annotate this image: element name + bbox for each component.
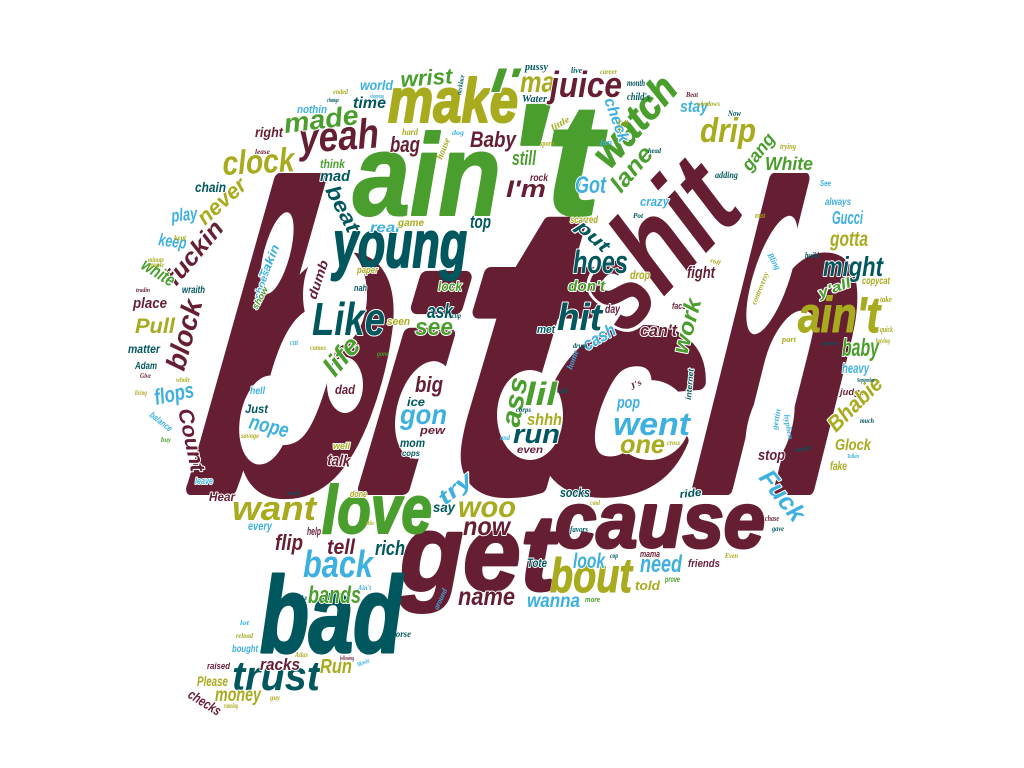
small filler words: living xyxy=(135,389,147,397)
large word: ain't (green): ain xyxy=(353,110,501,240)
small filler words: much xyxy=(860,417,874,425)
small filler words: running xyxy=(224,702,238,710)
medium words: cash xyxy=(579,320,619,354)
medium words xyxy=(128,62,890,719)
small filler words: ended xyxy=(333,88,348,96)
medium words: say xyxy=(433,499,456,515)
small filler words: Talkin xyxy=(847,454,859,460)
large word: bad: bad xyxy=(260,554,403,675)
medium words: well xyxy=(333,441,350,451)
small filler words: part xyxy=(781,335,797,344)
medium words: work xyxy=(667,294,707,356)
medium words: racks xyxy=(260,655,300,674)
medium words: Tote xyxy=(527,556,547,570)
medium words: seen xyxy=(387,316,410,328)
medium words: keep xyxy=(157,230,188,253)
large word: get: get xyxy=(399,492,559,613)
medium words: hoes xyxy=(573,244,628,280)
medium words: might xyxy=(823,251,884,282)
medium words: lock xyxy=(438,278,463,294)
medium words: day xyxy=(605,302,621,316)
medium words: pew xyxy=(419,425,447,437)
small filler words: tradin xyxy=(136,288,151,294)
medium words: done xyxy=(350,489,367,499)
small filler words: buying xyxy=(876,337,890,345)
small filler words: and xyxy=(500,434,510,442)
medium words: bag xyxy=(390,132,420,157)
medium words: wanna xyxy=(527,591,580,612)
large word: ain't (green): 't xyxy=(505,70,607,249)
medium words: Just xyxy=(245,402,269,416)
small filler words: lot xyxy=(240,619,250,627)
small filler words: around xyxy=(432,586,449,611)
medium words: trust xyxy=(232,652,322,699)
medium words: hell xyxy=(250,386,265,397)
medium words: fake xyxy=(830,459,847,473)
medium words: never xyxy=(192,171,252,230)
medium words: woo xyxy=(458,491,516,524)
large word: ain't (olive): ain't xyxy=(798,287,882,343)
medium words: show xyxy=(250,284,271,311)
medium words: drip xyxy=(700,112,756,150)
largest word: bitch: b xyxy=(173,103,428,579)
small filler words: following xyxy=(340,656,354,662)
medium words: Got xyxy=(575,172,607,199)
medium words: time xyxy=(353,95,386,112)
small filler words: drum xyxy=(573,342,587,350)
medium words: shhh xyxy=(527,410,562,429)
largest word: bitch: c xyxy=(526,226,720,550)
medium words: gang xyxy=(737,129,779,175)
medium words: Baby xyxy=(470,127,518,152)
medium words: place xyxy=(132,295,167,312)
medium words: name xyxy=(458,583,515,611)
small filler words: savage xyxy=(240,432,259,440)
small filler words: trying xyxy=(780,142,796,151)
medium words: mad xyxy=(320,168,351,185)
small filler words: call xyxy=(557,387,568,395)
largest word: bitch: i xyxy=(354,226,471,550)
small filler words: buy xyxy=(161,436,172,444)
medium words: Glock xyxy=(835,437,872,454)
medium words: talk xyxy=(327,452,352,471)
medium words: mom xyxy=(400,436,425,450)
medium words: leave xyxy=(195,476,213,486)
medium words: try xyxy=(433,467,479,510)
medium words: wraith xyxy=(182,285,205,296)
small filler words: adding xyxy=(715,170,738,180)
medium words: even xyxy=(517,445,543,456)
small filler words: Even xyxy=(724,552,738,560)
large word: bout: bout xyxy=(550,550,634,603)
medium words: top xyxy=(470,212,491,232)
medium words: told xyxy=(635,578,661,593)
medium words: Please xyxy=(197,673,228,689)
medium words: tell xyxy=(327,536,356,559)
medium words: think xyxy=(320,157,346,171)
medium words: always xyxy=(825,197,851,208)
medium words: rock xyxy=(530,173,548,184)
medium words: bands xyxy=(308,582,361,609)
medium words: lane xyxy=(605,141,659,198)
small filler words: minute xyxy=(148,256,164,264)
medium words: back xyxy=(303,544,374,586)
medium words: game xyxy=(397,218,424,229)
small filler words: controversy xyxy=(750,270,771,306)
small filler words: clip xyxy=(452,312,461,320)
small filler words: dog xyxy=(452,129,465,137)
medium words: friends xyxy=(688,558,720,570)
small filler words: home xyxy=(564,348,581,371)
small filler words: cop xyxy=(610,552,618,560)
small filler words: Ain't xyxy=(357,584,372,592)
small filler words: wound xyxy=(794,444,812,454)
medium words: scarred xyxy=(570,215,599,226)
small filler words: cross xyxy=(667,439,680,447)
medium words: shoes xyxy=(252,269,272,301)
medium words: baby xyxy=(842,334,880,362)
small filler words: little xyxy=(549,114,571,133)
medium words: gon xyxy=(399,399,447,430)
medium words: gotta xyxy=(829,228,868,251)
small filler words: horse xyxy=(391,629,411,639)
small filler words: sports xyxy=(539,139,555,148)
medium words: White xyxy=(765,154,813,174)
small filler words: couple xyxy=(148,261,164,269)
medium words: check xyxy=(600,96,632,146)
small filler words: Water xyxy=(522,94,547,105)
largest word: bitch xyxy=(173,103,892,579)
small filler words: live xyxy=(571,66,582,75)
medium words: life xyxy=(317,330,367,382)
small filler words: suck xyxy=(286,491,301,497)
medium words: Bhabie xyxy=(822,371,888,437)
small filler words: change xyxy=(327,98,339,104)
small filler words: Pot xyxy=(633,212,644,220)
small filler words: corps xyxy=(516,406,531,414)
medium words: nope xyxy=(247,411,291,443)
large word: shit: shit xyxy=(544,131,768,356)
small filler words: whole xyxy=(176,376,190,384)
medium words: flip xyxy=(275,530,303,555)
medium words: money xyxy=(215,685,262,706)
medium words: can't xyxy=(640,321,678,340)
medium words: Like xyxy=(312,293,385,345)
medium words: Gucci xyxy=(832,208,864,228)
small filler words: favors xyxy=(570,525,588,534)
medium words: y'all xyxy=(814,274,854,301)
medium words: wrist xyxy=(400,63,455,92)
medium words: socks xyxy=(560,485,590,500)
small filler words: lease xyxy=(255,148,270,156)
large word: make: make xyxy=(388,67,518,136)
medium words: lil xyxy=(525,376,558,412)
medium words: play xyxy=(170,203,199,226)
white pockets inside the large letters xyxy=(233,209,808,477)
small filler words: swear xyxy=(290,603,305,609)
medium words: still xyxy=(512,148,536,170)
medium words: want xyxy=(232,490,318,528)
large word: love: love xyxy=(322,472,432,548)
medium words: matter xyxy=(128,342,161,356)
medium words: Pull xyxy=(135,315,176,338)
medium words: see xyxy=(415,314,453,341)
small filler words: woke xyxy=(295,594,307,602)
small filler words: guy xyxy=(269,694,281,702)
medium words: met xyxy=(537,324,556,336)
medium words: every xyxy=(248,519,273,533)
medium words: ride xyxy=(679,487,702,501)
small filler words: September xyxy=(857,378,875,384)
medium words: big xyxy=(415,372,443,397)
large word: cause: cause xyxy=(555,476,765,564)
small filler words: J's xyxy=(627,377,644,392)
medium words: flops xyxy=(152,377,196,410)
medium words: dumb xyxy=(305,258,331,301)
medium words: Takin xyxy=(256,243,282,281)
medium words: nothin xyxy=(297,104,327,116)
medium words: mama xyxy=(640,549,660,559)
medium words: juice xyxy=(546,64,622,105)
medium words: pop xyxy=(616,393,640,412)
medium words: nah xyxy=(354,283,367,293)
medium words: help xyxy=(307,526,321,538)
medium words: block xyxy=(160,295,209,374)
medium words: heavy xyxy=(842,360,870,376)
medium words: one xyxy=(620,429,665,459)
small filler words: month xyxy=(627,78,645,88)
small filler words: comes xyxy=(310,344,326,352)
medium words: ice xyxy=(407,395,425,409)
medium words: don't xyxy=(568,278,606,295)
small filler words: career xyxy=(600,68,617,76)
medium words: clock xyxy=(221,141,297,183)
medium words: white xyxy=(138,254,179,290)
large word: young: young xyxy=(331,207,467,281)
large word: watch: watch xyxy=(584,67,686,176)
medium words: I' xyxy=(490,62,523,100)
small filler words: Give xyxy=(140,372,151,380)
medium words: cops xyxy=(402,449,421,458)
medium words: real xyxy=(370,219,401,235)
medium words: raised xyxy=(207,661,230,671)
medium words: bought xyxy=(232,644,259,655)
medium words: stop xyxy=(758,447,785,464)
small filler words: gone xyxy=(376,350,389,358)
small filler words: fan xyxy=(600,138,613,147)
medium words: yeah xyxy=(296,110,380,162)
medium words: drop xyxy=(630,268,650,282)
medium words: fight xyxy=(687,263,716,282)
medium words: I'm xyxy=(506,176,546,203)
medium words: Hear xyxy=(209,490,236,504)
small filler words xyxy=(135,62,893,710)
word cloud in the shape of a speech bubble xyxy=(128,62,893,719)
medium words: beat xyxy=(321,182,365,238)
medium words: more xyxy=(585,597,600,604)
small filler words: house xyxy=(435,136,453,161)
medium words: Fuck xyxy=(753,464,812,528)
largest word: bitch: h xyxy=(679,103,892,579)
small filler words: gettin xyxy=(770,407,783,431)
small filler words: take xyxy=(880,295,892,304)
small filler words: hyphen xyxy=(782,414,795,441)
small filler words: head xyxy=(648,147,661,155)
medium words: paper xyxy=(356,265,378,275)
small filler words: child's xyxy=(627,92,650,103)
medium words: crazy xyxy=(640,194,670,209)
medium words: put xyxy=(571,215,615,257)
medium words: See xyxy=(820,179,831,188)
medium words: Run xyxy=(320,656,352,678)
medium words: internet xyxy=(684,368,696,400)
medium words: now xyxy=(463,511,512,541)
medium words: Adam xyxy=(134,361,157,372)
small filler words: Bling xyxy=(765,250,783,272)
small filler words: pussy xyxy=(524,62,549,73)
small filler words: roll xyxy=(709,256,721,267)
medium words: prove xyxy=(664,575,680,584)
medium words: ask xyxy=(427,301,454,323)
small filler words: Mike xyxy=(365,521,374,527)
medium words: need xyxy=(640,551,683,578)
medium words: hit xyxy=(557,297,603,339)
medium words: ma xyxy=(520,66,555,99)
medium words: balance xyxy=(148,410,174,434)
medium words: stay xyxy=(680,97,709,116)
medium words: face xyxy=(672,301,686,311)
small filler words: Beat xyxy=(685,91,699,99)
largest word: bitch: t xyxy=(431,122,622,575)
medium words: went xyxy=(613,406,691,442)
small filler words: Tell xyxy=(617,119,629,128)
medium words: rich xyxy=(375,538,405,560)
medium words: made xyxy=(282,100,360,139)
small filler words: quick xyxy=(880,325,893,334)
medium words: Count xyxy=(173,406,209,475)
medium words: chain xyxy=(195,179,226,195)
medium words: checks xyxy=(185,686,225,719)
medium words: ass xyxy=(495,375,534,429)
small filler words: kept xyxy=(174,234,187,242)
small filler words: cut xyxy=(290,338,299,347)
small filler words: build xyxy=(805,251,820,260)
small filler words: chase xyxy=(765,514,779,523)
small filler words: Movie xyxy=(355,657,371,669)
medium words: fuckin xyxy=(160,215,229,291)
small filler words: windows xyxy=(697,100,720,108)
small filler words: gave xyxy=(771,525,784,533)
small filler words: reload xyxy=(236,632,253,640)
small filler words: Atlas xyxy=(294,651,308,659)
medium words: world xyxy=(360,77,393,93)
small filler words: Now xyxy=(727,109,742,118)
medium words: look xyxy=(573,550,606,573)
medium words: copycat xyxy=(862,276,890,287)
small filler words: must xyxy=(755,211,765,220)
small filler words: necklace xyxy=(455,74,466,95)
large word: ain't (green) xyxy=(353,70,607,249)
small filler words: shopping xyxy=(369,94,384,100)
small filler words: hard xyxy=(402,127,418,137)
small filler words: payment xyxy=(821,341,838,347)
medium words: judge xyxy=(839,387,865,397)
small filler words: cool xyxy=(590,499,600,507)
medium words: dad xyxy=(335,382,356,397)
medium words: right xyxy=(255,124,284,140)
medium words: run xyxy=(513,419,560,449)
